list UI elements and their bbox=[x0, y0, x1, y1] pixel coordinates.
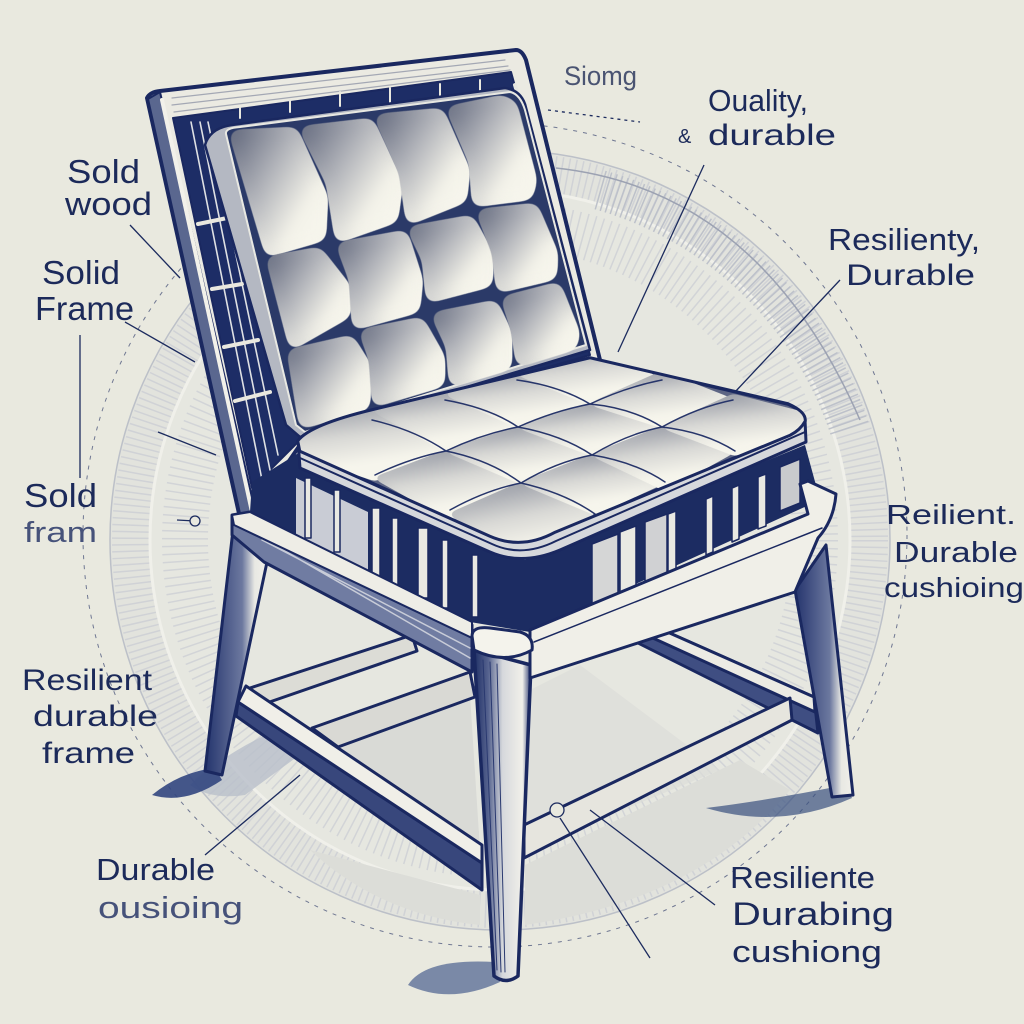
label: Siomg: Siomg bbox=[564, 61, 637, 91]
back frame bbox=[147, 50, 600, 518]
label: quality and durable: & bbox=[678, 126, 692, 148]
label: solid frame lower: fram bbox=[24, 517, 97, 549]
label: resiliente durabing cushiong bbox=[730, 860, 894, 969]
background circular diagram bbox=[83, 123, 907, 947]
frame verticals bbox=[191, 122, 278, 480]
label: solid frame lower: Sold bbox=[24, 477, 97, 514]
back legs bbox=[205, 530, 853, 797]
label: durable cushioning bbox=[96, 852, 243, 925]
label: durable cushioning: ousioing bbox=[98, 890, 243, 925]
label: quality and durable: Ouality, bbox=[708, 83, 808, 118]
floor shadows bbox=[152, 665, 852, 994]
label: resilient durable cushioning: Durable bbox=[894, 537, 1018, 569]
label: resiliently durable: Resilienty, bbox=[828, 222, 980, 257]
label: solid frame bbox=[35, 254, 134, 327]
label: resiliente durabing cushiong: cushiong bbox=[732, 934, 882, 969]
label: resilient durable frame bbox=[22, 664, 158, 770]
seat spring interior bbox=[250, 445, 820, 632]
chair bbox=[147, 50, 853, 980]
label: quality and durable: durable bbox=[708, 119, 836, 152]
label: solid frame lower bbox=[24, 477, 97, 549]
label: resiliente durabing cushiong: Durabing bbox=[732, 896, 894, 932]
label: resilient durable frame: Resilient bbox=[22, 664, 153, 697]
label: resilient durable frame: frame bbox=[42, 737, 135, 770]
leader lines bbox=[80, 110, 840, 958]
label: resiliently durable: Durable bbox=[846, 259, 975, 292]
seat rail bbox=[232, 481, 836, 678]
frame slats bbox=[198, 80, 480, 401]
seat creases bbox=[372, 380, 735, 514]
label: resilient durable cushioning: Reilient. bbox=[886, 499, 1016, 530]
label: resiliently durable bbox=[828, 222, 980, 292]
top rail grain bbox=[172, 60, 510, 112]
inner dark frame bbox=[173, 72, 590, 488]
label: resilient durable cushioning: cushioing bbox=[884, 572, 1024, 603]
label: resiliente durabing cushiong: Resiliente bbox=[730, 860, 875, 895]
label: solid wood: wood bbox=[64, 186, 152, 222]
back cushion bbox=[205, 88, 590, 437]
stretchers bbox=[236, 627, 818, 890]
label: quality and durable bbox=[678, 83, 836, 152]
label: solid frame: Solid bbox=[42, 254, 120, 291]
label: solid frame: Frame bbox=[35, 290, 134, 327]
label: durable cushioning: Durable bbox=[96, 852, 215, 887]
label: solid wood: Sold bbox=[67, 153, 140, 190]
seat cushion bbox=[296, 356, 808, 560]
front centre leg bbox=[474, 650, 531, 980]
label: resilient durable frame: durable bbox=[33, 700, 158, 733]
label: resilient durable cushioning bbox=[884, 499, 1024, 603]
label: solid wood bbox=[64, 153, 152, 222]
